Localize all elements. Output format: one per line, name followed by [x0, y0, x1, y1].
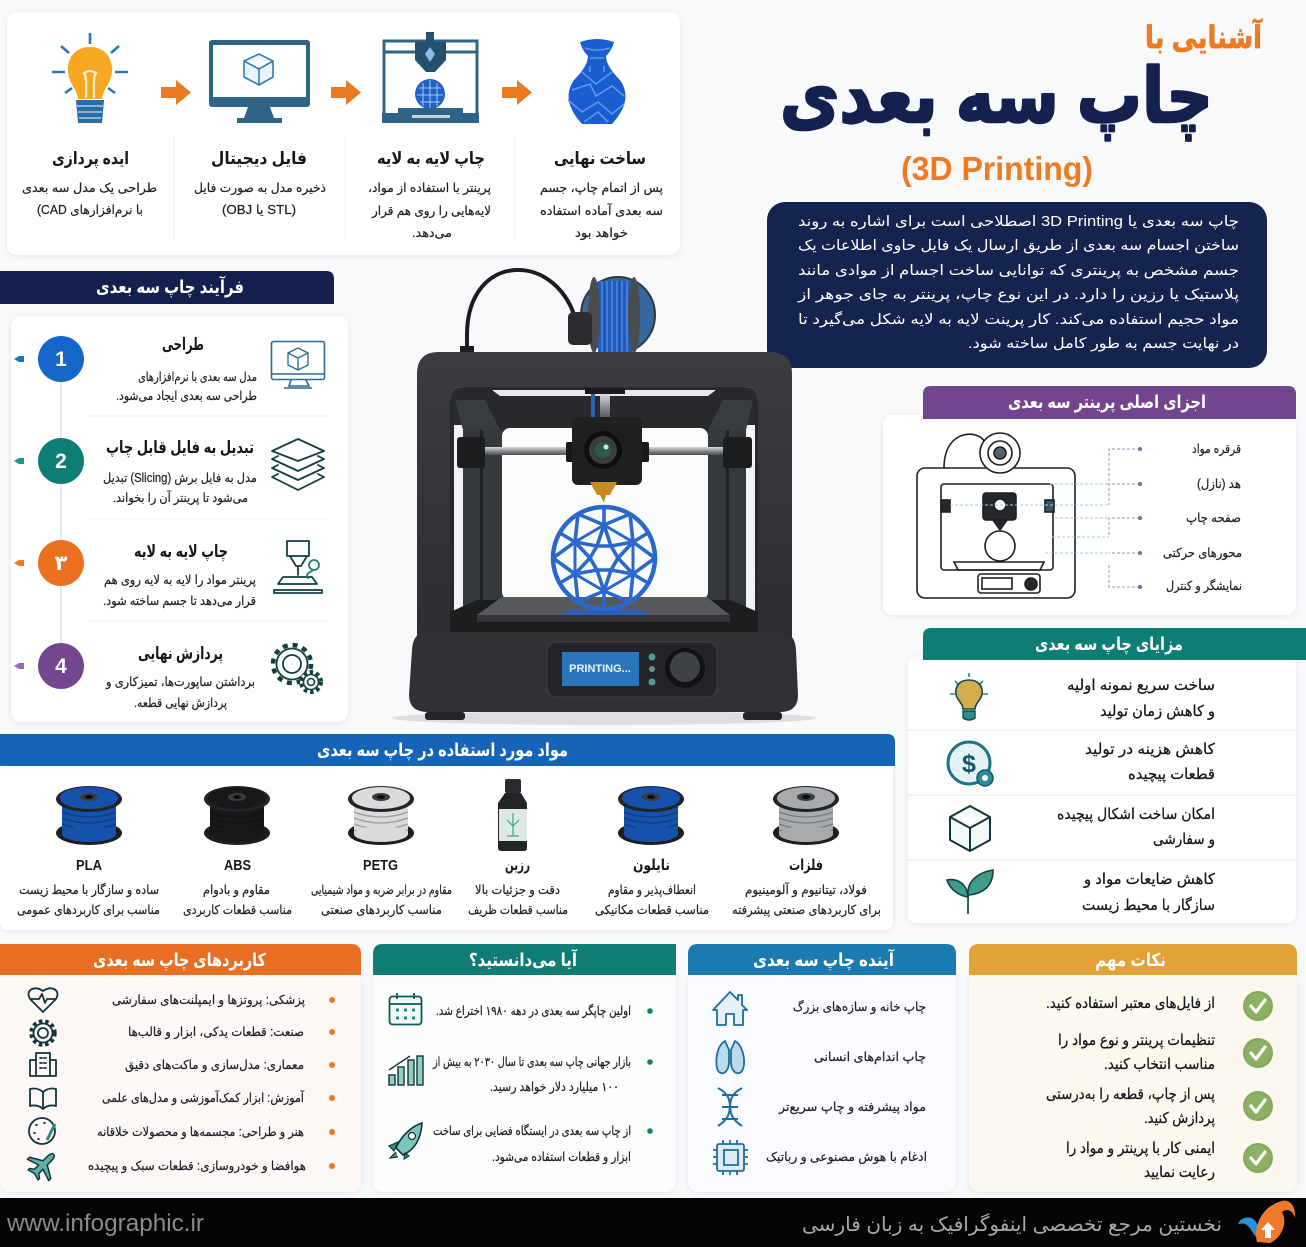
main title: چاپ سه بعدی — [780, 54, 1213, 141]
panel: process — [0, 271, 348, 722]
panel: definition: ساختن اجسام سه بعدی از طریق ارسال یک فایل حاوی اطلاعات یک — [798, 238, 1239, 254]
material: resin bottle: مناسب قطعات ظریف — [468, 903, 568, 918]
panel: did you know — [373, 944, 676, 1192]
print bed — [450, 597, 758, 632]
process step 2 — [14, 438, 324, 506]
benefit: waste — [947, 870, 1216, 914]
application list: آموزش: ابزار کمک‌آموزشی و مدل‌های علمی — [102, 1090, 304, 1106]
printer frame — [417, 352, 792, 640]
panel: benefits — [908, 628, 1306, 923]
panel: definition: مواد حجیم استفاده می‌کند. کار پرینت لایه به لایه شکل می‌گیرد تا — [798, 311, 1239, 328]
control panel: PRINTING... — [569, 663, 631, 675]
future list: چاپ اندام‌های انسانی — [814, 1050, 926, 1064]
icon: gears — [273, 645, 322, 693]
material: PLA: مناسب برای کاربردهای عمومی — [17, 903, 160, 918]
material: metals — [732, 786, 881, 918]
process step 4: 4 — [55, 655, 67, 678]
panel: future — [688, 944, 956, 1192]
heading: process: فرآیند چاپ سه بعدی — [96, 275, 244, 298]
title block — [780, 18, 1263, 187]
process step 3: چاپ لایه به لایه — [134, 542, 228, 562]
process step 2: 2 — [55, 450, 67, 473]
note 3 — [1046, 1086, 1273, 1128]
footer url: www.infographic.ir — [6, 1210, 204, 1237]
title kicker: آشنایی با — [1145, 18, 1263, 55]
process step 4 — [14, 643, 322, 711]
fact: space — [389, 1123, 653, 1165]
material: ABS: ABS — [224, 857, 251, 874]
material: metals: فولاد، تیتانیوم و آلومینیوم — [745, 882, 867, 898]
benefit: cost — [948, 741, 1216, 786]
process step 4: پردازش نهایی قطعه. — [134, 696, 227, 711]
printer interior — [450, 387, 758, 632]
filament spool — [568, 277, 655, 353]
benefit: complex shapes: و سفارشی — [1153, 831, 1215, 848]
heading: future — [688, 944, 956, 975]
icon: extruder — [274, 541, 322, 593]
future icons — [713, 992, 748, 1175]
step: final build: پس از اتمام چاپ، جسم — [540, 181, 664, 196]
printed lattice sphere — [553, 507, 655, 609]
control panel — [547, 642, 717, 697]
panel: printer parts — [883, 386, 1296, 615]
fact: market: بازار جهانی چاپ سه بعدی تا سال ۲۰۳۰ به بیش از — [432, 1055, 631, 1070]
parts labels: صفحه چاپ — [1186, 511, 1241, 525]
heading: applications: کاربردهای چاپ سه بعدی — [93, 950, 266, 971]
heading: process — [0, 271, 334, 304]
process step 3: ۳ — [55, 552, 68, 575]
benefit: rapid prototyping: و کاهش زمان تولید — [1100, 703, 1215, 720]
fact: market: ۱۰۰ میلیارد دلار خواهد رسید. — [490, 1080, 619, 1095]
panel: important notes — [969, 944, 1297, 1192]
material: metals: برای کاربردهای صنعتی پیشرفته — [732, 903, 881, 918]
application list: صنعت: قطعات یدکی، ابزار و قالب‌ها — [128, 1025, 304, 1040]
process step 1: مدل سه بعدی با نرم‌افزارهای — [138, 370, 257, 385]
future list: مواد پیشرفته و چاپ سریع‌تر — [778, 1100, 926, 1115]
step: layer printing: می‌دهد. — [412, 226, 452, 240]
benefit: rapid prototyping — [950, 673, 1215, 720]
heading: future: آینده چاپ سه بعدی — [753, 948, 895, 971]
material: nylon — [595, 786, 709, 917]
material: PETG: مقاوم در برابر ضربه و مواد شیمیایی — [311, 883, 452, 898]
heading: did you know — [373, 944, 676, 975]
step: idea: ایده پردازی — [52, 149, 129, 169]
icon: idea bulb — [52, 33, 128, 123]
benefit: waste: کاهش ضایعات مواد و — [1083, 871, 1216, 888]
panel: definition — [767, 202, 1267, 368]
filament cable — [467, 270, 577, 350]
heading: notes — [969, 944, 1297, 975]
print head — [566, 417, 649, 503]
leader lines — [950, 447, 1142, 589]
material: PLA — [17, 786, 160, 918]
process step 1: 1 — [55, 348, 67, 371]
step: idea: طراحی یک مدل سه بعدی — [22, 181, 157, 196]
heading: parts — [923, 386, 1296, 419]
material: resin bottle: رزین — [505, 857, 530, 874]
note 4: رعایت نمایید — [1144, 1164, 1215, 1181]
logo — [1238, 1201, 1295, 1243]
panel: definition: پلاستیک یا رزین را دارد. در این نوع چاپ، پرینتر به جای جوهر از — [797, 287, 1239, 303]
arrow: step 2 to 3 — [331, 80, 361, 105]
step: digital file: (STL یا OBJ) — [222, 203, 296, 217]
heading: materials — [0, 734, 895, 766]
fact: space: از چاپ سه بعدی در ایستگاه فضایی برای ساخت — [433, 1123, 631, 1139]
material: resin bottle: دقت و جزئیات بالا — [475, 883, 560, 898]
icon: printed vase — [568, 39, 625, 124]
fact: market — [389, 1055, 653, 1095]
heading: benefits: مزایای چاپ سه بعدی — [1035, 634, 1183, 655]
material: ABS — [183, 786, 292, 918]
process step 4: برداشتن ساپورت‌ها، تمیزکاری و — [105, 675, 255, 690]
fact: space: ابزار و قطعات استفاده می‌شود. — [492, 1150, 631, 1165]
icon: mini printer — [382, 32, 479, 123]
material: PETG: PETG — [363, 857, 398, 874]
printer base — [409, 632, 798, 712]
icon: bulb — [950, 673, 988, 720]
material: PETG — [311, 786, 452, 918]
material: PLA: ساده و سازگار با محیط زیست — [19, 882, 159, 898]
step: final build: ساخت نهایی — [554, 149, 646, 169]
note 1 — [1046, 991, 1273, 1021]
heading: applications — [0, 944, 361, 975]
material: resin bottle — [468, 779, 568, 918]
process step 3 — [14, 540, 322, 609]
note 4 — [1066, 1140, 1273, 1181]
icon: dollar coin: $ — [962, 750, 976, 778]
note 2: مناسب انتخاب کنید. — [1104, 1056, 1215, 1073]
step: digital file: فایل دیجیتال — [211, 149, 307, 168]
chart: hero 3D printer illustration — [392, 270, 816, 725]
icon: dollar coin — [948, 742, 993, 786]
process step 4: پردازش نهایی — [138, 644, 223, 664]
heading: notes: نکات مهم — [1095, 950, 1166, 971]
process step 2: می‌شود تا پرینتر آن را بخواند. — [113, 490, 248, 506]
fact: first printer: اولین چاپگر سه بعدی در دهه ۱۹۸۰ اختراع شد. — [436, 1003, 631, 1019]
step: layer printing: پرینتر با استفاده از مواد، — [368, 181, 492, 196]
benefit: rapid prototyping: ساخت سریع نمونه اولیه — [1067, 677, 1215, 694]
arrow: step 1 to 2 — [161, 80, 191, 105]
benefit: complex shapes — [950, 806, 1215, 851]
application list: هوافضا و خودروسازی: قطعات سبک و پیچیده — [88, 1159, 306, 1174]
note 3: پس از چاپ، قطعه را به‌درستی — [1046, 1086, 1215, 1104]
material: nylon: نایلون — [633, 857, 670, 874]
x-axis rod and carriages — [457, 388, 752, 468]
future list — [766, 999, 927, 1165]
parts labels: نمایشگر و کنترل — [1166, 578, 1242, 594]
arrow: step 3 to 4 — [502, 80, 532, 105]
panel: applications — [0, 944, 361, 1192]
material: ABS: مقاوم و بادوام — [203, 883, 270, 898]
icon: cube — [950, 806, 990, 851]
panel: materials — [0, 734, 895, 930]
step: digital file — [194, 149, 326, 217]
icon: layers — [272, 439, 324, 490]
note 2: تنظیمات پرینتر و نوع مواد را — [1058, 1032, 1215, 1050]
benefit: complex shapes: امکان ساخت اشکال پیچیده — [1057, 806, 1215, 824]
icon: digital file monitor — [209, 40, 310, 123]
step: layer printing — [368, 149, 492, 240]
panel: definition: در نهایت جسم به طور کامل ساخته شود. — [968, 336, 1239, 352]
icon: monitor — [272, 342, 324, 388]
benefit: cost: کاهش هزینه در تولید — [1085, 741, 1216, 758]
process step 1: طراحی — [162, 335, 204, 355]
step: idea — [22, 149, 157, 218]
subtitle: (3D Printing) — [901, 150, 1093, 187]
step: final build — [540, 149, 664, 241]
footer tagline: نخستین مرجع تخصصی اینفوگرافیک به زبان فارسی — [802, 1213, 1222, 1236]
application list: هنر و طراحی: مجسمه‌ها و محصولات خلاقانه — [97, 1125, 304, 1140]
benefit: waste: سازگار با محیط زیست — [1082, 896, 1215, 914]
note 1: از فایل‌های معتبر استفاده کنید. — [1046, 995, 1215, 1012]
step: layer printing: چاپ لایه به لایه — [377, 149, 485, 169]
step: final build: سه بعدی آماده استفاده — [540, 203, 663, 218]
panel: workflow strip — [7, 12, 680, 255]
material: PETG: مناسب کاربردهای صنعتی — [321, 903, 442, 918]
icon: rocket — [389, 1123, 422, 1159]
parts labels: محورهای حرکتی — [1163, 546, 1242, 561]
footer — [0, 1198, 1306, 1247]
heading: materials: مواد مورد استفاده در چاپ سه بعدی — [317, 740, 568, 761]
benefit: cost: قطعات پیچیده — [1128, 766, 1215, 784]
note 4: ایمنی کار با پرینتر و مواد را — [1066, 1140, 1215, 1158]
application icons — [22, 988, 64, 1186]
future list: ادغام با هوش مصنوعی و رباتیک — [766, 1150, 927, 1165]
step: final build: خواهد بود — [575, 226, 628, 241]
heading: benefits — [923, 628, 1306, 660]
note 3: پردازش کنید. — [1144, 1110, 1215, 1128]
material: nylon: مناسب قطعات مکانیکی — [595, 903, 709, 917]
process step 3: پرینتر مواد را لایه به لایه روی هم — [104, 573, 256, 588]
process step 3: قرار می‌دهد تا جسم ساخته شود. — [103, 594, 256, 609]
step: idea: با نرم‌افزارهای CAD) — [37, 203, 143, 218]
step: digital file: ذخیره مدل به صورت فایل — [194, 181, 326, 196]
heading: parts: اجزای اصلی پرینتر سه بعدی — [1008, 392, 1206, 413]
parts labels — [1163, 442, 1242, 594]
material: ABS: مناسب قطعات کاربردی — [183, 903, 292, 918]
application list: معماری: مدل‌سازی و ماکت‌های دقیق — [125, 1058, 304, 1073]
future list: چاپ خانه و سازه‌های بزرگ — [793, 999, 926, 1015]
diagram: printer schematic — [917, 433, 1075, 598]
application list: پزشکی: پروتزها و ایمپلنت‌های سفارشی — [112, 993, 305, 1008]
note 2 — [1058, 1032, 1273, 1073]
process step 1 — [14, 335, 324, 404]
parts labels: هد (نازل) — [1197, 477, 1241, 492]
icon: rising chart — [389, 1056, 423, 1085]
icon: calendar — [390, 993, 422, 1024]
material: PLA: PLA — [76, 857, 102, 874]
icon: sprout — [947, 870, 993, 914]
step: layer printing: لایه‌هایی را روی هم قرار — [371, 204, 491, 219]
panel: definition: جسم مشخص به پرینتری که توانایی ساخت اجسام از موادی مانند — [798, 263, 1239, 279]
process step 2: تبدیل به فایل قابل چاپ — [106, 438, 254, 458]
panel: definition: چاپ سه بعدی یا 3D Printing اصطلاحی است برای اشاره به روند — [798, 214, 1239, 230]
material: metals: فلزات — [789, 857, 823, 874]
material: nylon: انعطاف‌پذیر و مقاوم — [608, 883, 696, 898]
process step 1: طراحی سه بعدی ایجاد می‌شود. — [116, 389, 257, 404]
fact: first printer — [390, 993, 653, 1024]
process step 2: مدل به فایل برش (Slicing) تبدیل — [103, 471, 257, 486]
heading: did you know: آیا می‌دانستید؟ — [469, 948, 578, 970]
parts labels: قرقره مواد — [1192, 442, 1241, 457]
application list — [88, 993, 335, 1174]
